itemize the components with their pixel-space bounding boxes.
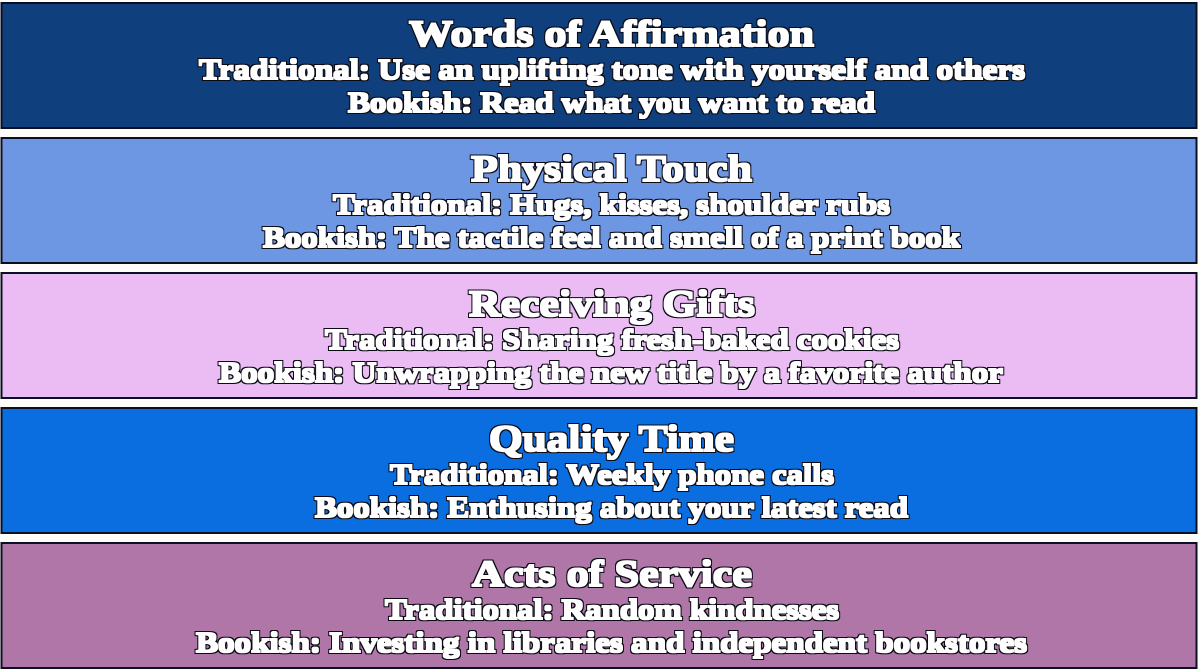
heading: words of affirmation: Words of Affirmation bbox=[409, 14, 815, 55]
text: traditional acts of service: Traditional: Random kindnesses bbox=[385, 595, 839, 626]
panel background: quality time bbox=[2, 408, 1196, 533]
panel background: words of affirmation bbox=[2, 3, 1196, 128]
text: bookish receiving gifts: Bookish: Unwrapping the new title by a favorite author bbox=[219, 358, 1003, 389]
panel: quality time bbox=[2, 408, 1196, 533]
text: bookish words of affirmation: Bookish: Read what you want to read bbox=[348, 88, 876, 119]
text: bookish quality time: Bookish: Enthusing about your latest read bbox=[315, 493, 909, 524]
panel: physical touch bbox=[2, 138, 1196, 263]
text: bookish physical touch: Bookish: The tactile feel and smell of a print book bbox=[263, 223, 960, 254]
text: traditional physical touch: Traditional: Hugs, kisses, shoulder rubs bbox=[333, 190, 890, 221]
heading: acts of service: Acts of Service bbox=[472, 554, 752, 595]
heading: quality time: Quality Time bbox=[489, 419, 734, 460]
panel background: physical touch bbox=[2, 138, 1196, 263]
heading: receiving gifts: Receiving Gifts bbox=[469, 284, 755, 325]
panel: receiving gifts bbox=[2, 273, 1196, 398]
text: traditional receiving gifts: Traditional: Sharing fresh-baked cookies bbox=[325, 325, 899, 356]
panel background: acts of service bbox=[2, 543, 1196, 668]
panel: words of affirmation bbox=[2, 3, 1196, 128]
panel: acts of service bbox=[2, 543, 1196, 668]
text: bookish acts of service: Bookish: Investing in libraries and independent bookstores bbox=[196, 628, 1027, 659]
heading: physical touch: Physical Touch bbox=[471, 149, 752, 190]
text: traditional words of affirmation: Traditional: Use an uplifting tone with yourself and others bbox=[199, 55, 1025, 86]
text: traditional quality time: Traditional: Weekly phone calls bbox=[390, 460, 834, 491]
panel background: receiving gifts bbox=[2, 273, 1196, 398]
